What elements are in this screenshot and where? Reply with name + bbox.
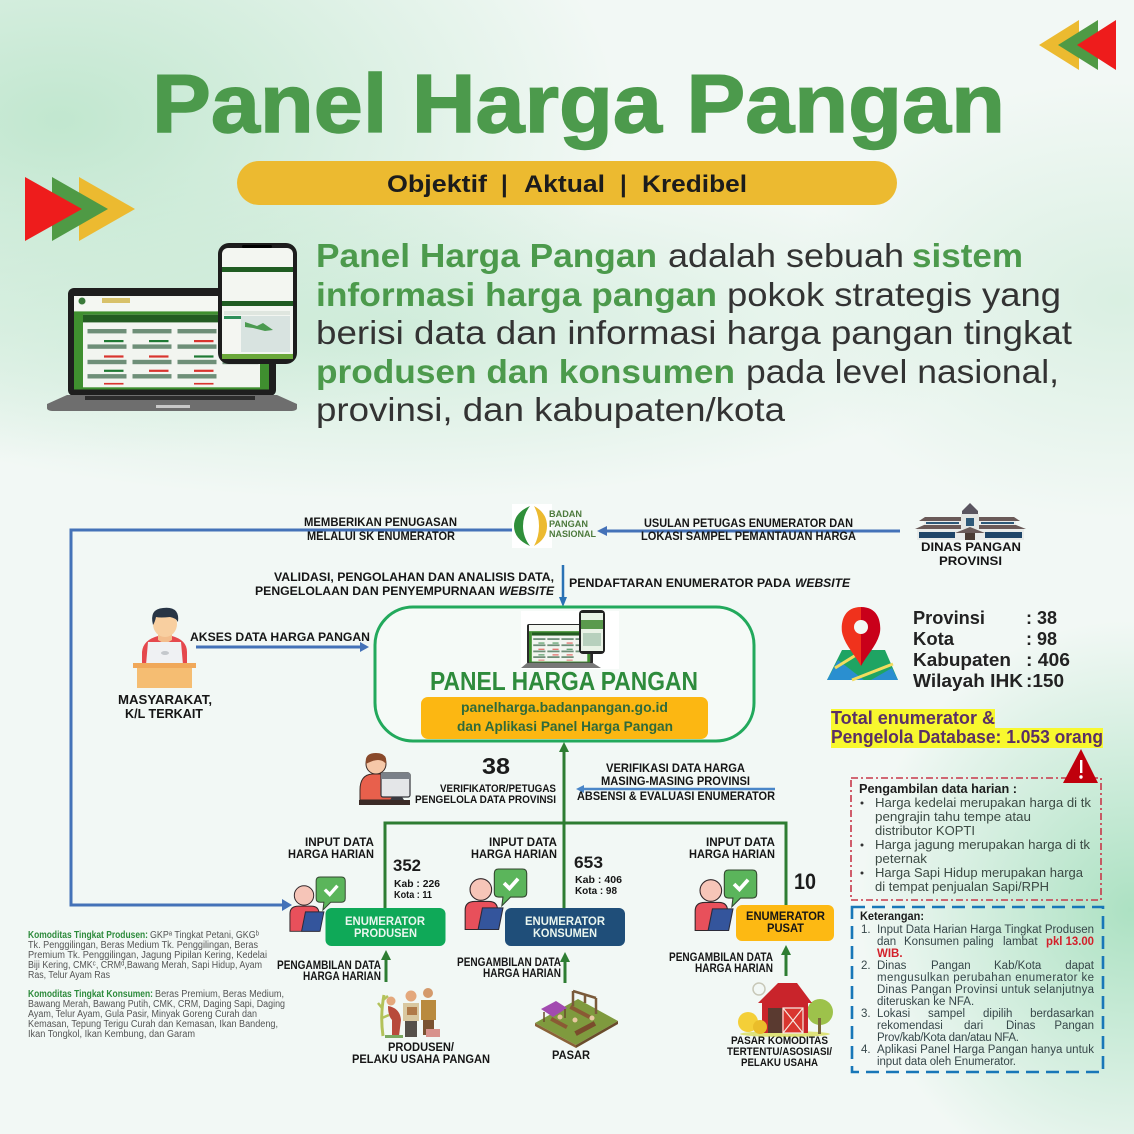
callout: pengambilan data harian: peternak	[875, 852, 928, 866]
icon: enumerator konsumen	[465, 869, 527, 929]
callout: keterangan: paling	[963, 936, 994, 948]
icon: enumerator pusat	[695, 870, 757, 930]
label: pasar komoditas	[727, 1035, 832, 1069]
label: input data konsumen	[471, 835, 557, 861]
label: validasi: WEBSITE	[499, 584, 555, 598]
label: pengambilan pusat	[669, 950, 773, 975]
tagline pill: Kredibel	[642, 171, 747, 198]
intro paragraph: pokok strategis yang	[727, 277, 1061, 314]
label: verifikasi with arrow	[576, 761, 775, 803]
tagline pill: |	[620, 171, 627, 198]
label: input data pusat: HARGA HARIAN	[689, 847, 775, 861]
callout: keterangan: Input Data Harian Harga Tingkat Produsen	[877, 924, 1094, 936]
icon: laptop and phone showing dashboard	[47, 243, 297, 411]
figure: 352 produsen: Kota : 11	[394, 889, 432, 901]
intro paragraph: adalah sebuah	[668, 238, 904, 275]
callout: keterangan: diteruskan ke NFA.	[877, 996, 974, 1008]
callout: keterangan: Prov/kab/Kota dan/atau NFA.	[877, 1032, 1019, 1044]
label: verifikasi with arrow: ABSENSI & EVALUASI ENUMERATOR	[577, 789, 775, 803]
tagline pill: Aktual	[524, 171, 605, 198]
coverage statistics: : 98	[1026, 628, 1057, 649]
coverage statistics: Kabupaten	[913, 649, 1011, 670]
label: pengambilan pusat: HARGA HARIAN	[695, 961, 773, 975]
icon: warning triangle	[1063, 749, 1098, 783]
text block: komoditas tingkat konsumen: Komoditas Tingkat Konsumen:	[28, 989, 153, 1000]
figure: 38 verifikator: 38	[482, 753, 510, 779]
text block: komoditas tingkat produsen: Ras, Telur Ayam Ras	[28, 970, 110, 981]
label: pasar komoditas: PASAR KOMODITAS	[731, 1035, 828, 1047]
panel: Panel Harga Pangan	[375, 607, 754, 741]
box: enumerator konsumen: KONSUMEN	[533, 926, 597, 940]
figure: 653 konsumen: Kab : 406	[575, 874, 622, 886]
label: produsen: PELAKU USAHA PANGAN	[352, 1052, 490, 1066]
coverage statistics: :150	[1026, 670, 1064, 691]
label: input data konsumen: HARGA HARIAN	[471, 847, 557, 861]
text block: komoditas tingkat konsumen: Beras Premium, Beras Medium,	[155, 989, 284, 1000]
label: input data produsen: HARGA HARIAN	[288, 847, 374, 861]
label: pengambilan pusat: PENGAMBILAN DATA	[669, 950, 773, 964]
text block: komoditas tingkat produsen: Tk. Penggilingan, Beras Medium Tk. Penggilingan, Beras	[28, 940, 258, 951]
callout: keterangan: 4.	[861, 1044, 871, 1056]
callout: keterangan: berdasarkan	[1030, 1008, 1094, 1020]
figure: 10 pusat: 10	[794, 869, 816, 894]
label: input data pusat	[689, 835, 775, 861]
callout: keterangan: sampel	[928, 1008, 965, 1020]
icon: masyarakat at laptop	[133, 608, 196, 688]
callout: keterangan: WIB.	[877, 948, 903, 960]
decorative arrows: left	[25, 177, 135, 241]
callout: total enumerator: Pengelola Database: 1.053 orang	[831, 727, 1103, 747]
label: verifikasi with arrow: VERIFIKASI DATA HARGA	[606, 761, 745, 775]
box: enumerator produsen: PRODUSEN	[354, 926, 417, 940]
callout: keterangan: 3.	[861, 1008, 871, 1020]
panel: Panel Harga Pangan: panelharga.badanpangan.go.id	[461, 699, 668, 715]
intro paragraph: provinsi, dan kabupaten/kota	[316, 392, 785, 429]
callout: keterangan: 1.	[861, 924, 871, 936]
intro paragraph: Panel Harga Pangan	[316, 238, 657, 275]
panel: Panel Harga Pangan: dan Aplikasi Panel Harga Pangan	[457, 718, 673, 734]
box: enumerator pusat: ENUMERATOR	[746, 909, 825, 923]
label: usulan: LOKASI SAMPEL PEMANTAUAN HARGA	[641, 529, 856, 543]
label: masyarakat: MASYARAKAT,	[118, 692, 212, 707]
label: pengambilan produsen: PENGAMBILAN DATA	[277, 958, 381, 972]
figure: 38 verifikator	[415, 753, 556, 806]
callout: keterangan: Keterangan:	[860, 911, 924, 923]
label: validasi: VALIDASI, PENGOLAHAN DAN ANALISIS DATA,	[274, 570, 554, 584]
coverage statistics	[913, 607, 1070, 691]
icon: market	[535, 991, 618, 1048]
arrow: Badan Pangan Nasional to enumerator	[71, 530, 513, 911]
text block: komoditas tingkat produsen: Premium Tk. Penggilingan, Jagung Pipilan Kering, Kedelai	[28, 950, 267, 961]
coverage statistics: : 38	[1026, 607, 1057, 628]
figure: 352 produsen: Kab : 226	[394, 878, 440, 890]
callout: keterangan: input data oleh Enumerator.	[877, 1056, 1016, 1068]
callout: keterangan: Dinas	[877, 960, 907, 972]
callout: keterangan: dipilih	[983, 1008, 1012, 1020]
callout: pengambilan data harian: distributor KOPTI	[875, 824, 975, 838]
intro paragraph: produsen dan konsumen	[316, 354, 735, 391]
arrow: produsen up	[381, 950, 391, 982]
callout: pengambilan data harian: Pengambilan data harian :	[859, 781, 1017, 796]
icon: small device	[521, 610, 619, 669]
text block: komoditas tingkat produsen: Biji Kering, CMKᶜ, CRMᵈ,Bawang Merah, Sapi Hidup, Ayam	[28, 960, 262, 971]
icon: farmers	[378, 988, 440, 1038]
label: pengambilan produsen	[277, 958, 381, 983]
box: enumerator konsumen: ENUMERATOR	[525, 914, 605, 928]
text block: komoditas tingkat konsumen	[28, 989, 285, 1040]
panel: Panel Harga Pangan: PANEL HARGA PANGAN	[430, 666, 698, 696]
label: input data produsen	[288, 835, 374, 861]
callout: keterangan: Pangan	[1054, 1020, 1094, 1032]
logo: Badan Pangan Nasional: PANGAN	[549, 519, 588, 530]
callout: keterangan: Dinas	[1006, 1020, 1036, 1032]
text block: komoditas tingkat konsumen: Ayam, Telur Ayam, Gula Pasir, Minyak Goreng Curah dan	[28, 1009, 257, 1020]
callout: keterangan	[852, 907, 1103, 1072]
label: input data produsen: INPUT DATA	[305, 835, 374, 849]
logo: Badan Pangan Nasional	[512, 504, 596, 548]
arrow: akses data	[196, 642, 369, 652]
label: akses data: AKSES DATA HARGA PANGAN	[190, 630, 370, 644]
callout: keterangan: mengusulkan perubahan enumerator ke	[877, 972, 1094, 984]
figure: 352 produsen: 352	[393, 856, 421, 875]
tagline pill: Objektif	[387, 171, 488, 198]
callout: keterangan: dapat	[1065, 960, 1095, 972]
figure: 653 konsumen	[574, 853, 622, 897]
label: penugasan: MELALUI SK ENUMERATOR	[307, 529, 455, 543]
callout: pengambilan data harian: Harga Sapi Hidup merupakan harga	[875, 866, 1083, 880]
label: produsen: PRODUSEN/	[388, 1040, 455, 1054]
callout: pengambilan data harian: Harga jagung merupakan harga di tk	[875, 838, 1091, 852]
label: pengambilan konsumen	[457, 955, 561, 980]
callout: total enumerator: Total enumerator &	[831, 708, 995, 728]
label: penugasan: MEMBERIKAN PENUGASAN	[304, 515, 457, 529]
label: Dinas Pangan Provinsi: DINAS PANGAN	[921, 540, 1021, 554]
logo: Badan Pangan Nasional: BADAN	[549, 509, 582, 520]
icon: barn	[738, 983, 833, 1037]
label: pasar komoditas: PELAKU USAHA	[741, 1057, 818, 1069]
label: validasi	[255, 570, 555, 598]
label: masyarakat: K/L TERKAIT	[125, 706, 203, 721]
text block: komoditas tingkat konsumen: Kemasan, Tepung Terigu Curah dan Kemasan, Ikan Bandeng,	[28, 1019, 278, 1030]
text block: komoditas tingkat produsen: Komoditas Tingkat Produsen:	[28, 930, 148, 941]
arrow: pasar komoditas up	[781, 945, 791, 976]
callout: keterangan: Pangan	[931, 960, 971, 972]
coverage statistics: Kota	[913, 628, 955, 649]
intro paragraph: informasi harga pangan	[316, 277, 717, 314]
tagline pill: |	[501, 171, 508, 198]
coverage statistics: Wilayah IHK	[913, 670, 1024, 691]
callout: keterangan: Dinas Pangan Provinsi untuk selanjutnya	[877, 984, 1095, 996]
arrow: Dinas to Badan Pangan	[597, 526, 900, 536]
box: enumerator pusat	[736, 905, 834, 941]
callout: total enumerator	[831, 708, 1103, 748]
label: input data pusat: INPUT DATA	[706, 835, 775, 849]
figure: 352 produsen	[393, 856, 440, 901]
arrow: Badan Pangan to panel	[559, 565, 567, 607]
callout: keterangan: pkl 13.00	[1046, 936, 1094, 948]
label: pendaftaran: PENDAFTARAN ENUMERATOR PADA	[569, 576, 791, 590]
figure: 38 verifikator: PENGELOLA DATA PROVINSI	[415, 794, 556, 806]
decorative arrows: top right	[1039, 20, 1116, 70]
label: validasi: PENGELOLAAN DAN PENYEMPURNAAN	[255, 584, 495, 598]
icon: Dinas building	[915, 503, 1026, 540]
callout: keterangan: dan	[877, 936, 896, 948]
intro paragraph: pada level nasional,	[746, 354, 1059, 391]
callout: keterangan: rekomendasi	[877, 1020, 943, 1032]
icon: map pin	[827, 607, 898, 680]
label: verifikasi with arrow: MASING-MASING PROVINSI	[601, 774, 750, 788]
label: Dinas Pangan Provinsi: PROVINSI	[939, 554, 1002, 568]
label: pengambilan produsen: HARGA HARIAN	[303, 969, 381, 983]
figure: 653 konsumen: Kota : 98	[575, 885, 617, 897]
callout: pengambilan data harian	[851, 778, 1101, 900]
arrows: enumerator network to panel	[385, 742, 786, 908]
arrow: pasar up	[560, 952, 570, 983]
label: pengambilan konsumen: PENGAMBILAN DATA	[457, 955, 561, 969]
text block: komoditas tingkat produsen: GKPᵃ Tingkat Petani, GKGᵇ	[150, 930, 259, 941]
label: pengambilan konsumen: HARGA HARIAN	[483, 966, 561, 980]
text block: komoditas tingkat konsumen: Ikan Tongkol, Ikan Kembung, dan Garam	[28, 1029, 195, 1040]
callout: keterangan: Aplikasi Panel Harga Pangan hanya untuk	[877, 1044, 1094, 1056]
label: masyarakat	[118, 692, 212, 721]
icon: enumerator produsen	[290, 877, 345, 931]
label: pasar komoditas: TERTENTU/ASOSIASI/	[727, 1046, 832, 1058]
callout: keterangan: lambat	[1003, 936, 1038, 948]
label: usulan: USULAN PETUGAS ENUMERATOR DAN	[644, 516, 853, 530]
box: enumerator pusat: PUSAT	[767, 921, 805, 935]
intro paragraph: sistem	[912, 238, 1023, 275]
coverage statistics: Provinsi	[913, 607, 985, 628]
icon: verifikator at computer	[359, 753, 410, 805]
title: Panel Harga Pangan	[152, 57, 1005, 150]
label: Dinas Pangan Provinsi	[921, 540, 1021, 568]
callout: pengambilan data harian: pengrajin tahu tempe atau	[875, 810, 1031, 824]
coverage statistics: : 406	[1026, 649, 1070, 670]
label: penugasan	[304, 515, 457, 543]
intro paragraph: berisi data dan informasi harga pangan tingkat	[316, 315, 1073, 352]
box: enumerator konsumen	[505, 908, 625, 946]
callout: pengambilan data harian: di tempat penjualan Sapi/RPH	[875, 880, 1049, 894]
label: pendaftaran: WEBSITE	[795, 576, 851, 590]
callout: pengambilan data harian: Harga kedelai merupakan harga di tk	[875, 796, 1092, 810]
logo: Badan Pangan Nasional: NASIONAL	[549, 529, 596, 540]
figure: 38 verifikator: VERIFIKATOR/PETUGAS	[440, 783, 556, 795]
label: usulan	[641, 516, 856, 543]
callout: keterangan: Konsumen	[904, 936, 959, 948]
callout: keterangan: 2.	[861, 960, 871, 972]
text block: komoditas tingkat produsen	[28, 930, 267, 981]
label: pasar: PASAR	[552, 1048, 590, 1062]
box: enumerator produsen	[326, 908, 446, 946]
callout: keterangan: dari	[964, 1020, 983, 1032]
label: produsen	[352, 1040, 490, 1066]
text block: komoditas tingkat konsumen: Bawang Merah, Bawang Putih, CMK, CRM, Daging Sapi, Daging	[28, 999, 285, 1010]
box: enumerator produsen: ENUMERATOR	[345, 914, 425, 928]
figure: 653 konsumen: 653	[574, 853, 603, 872]
callout: keterangan: Lokasi	[877, 1008, 910, 1020]
callout: keterangan: Kab/Kota	[994, 960, 1042, 972]
intro paragraph	[316, 238, 1073, 429]
tagline pill	[237, 161, 897, 205]
label: input data konsumen: INPUT DATA	[489, 835, 557, 849]
